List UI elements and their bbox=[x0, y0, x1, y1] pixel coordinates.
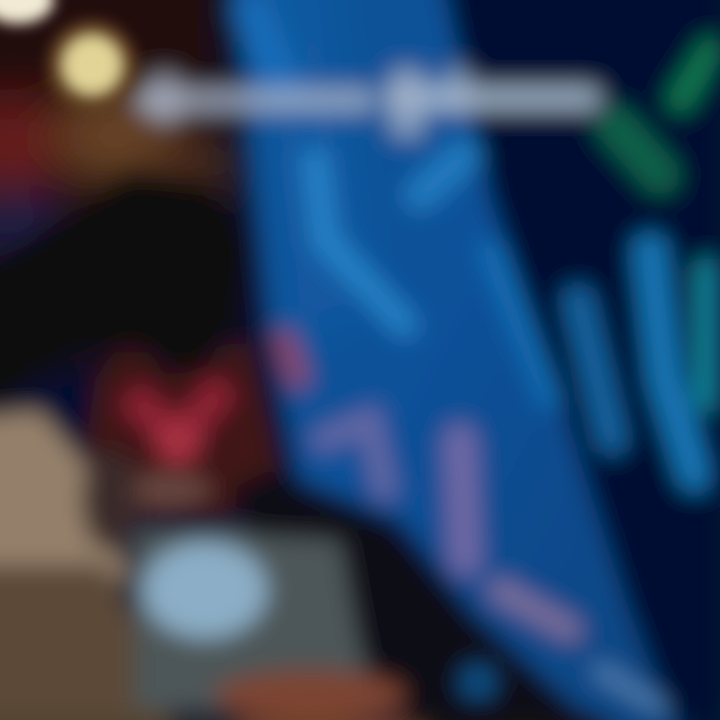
chart: light blue screen lines bbox=[250, 10, 550, 400]
object: orange skin at bottom bbox=[215, 670, 405, 720]
icon: top-left light bbox=[0, 0, 54, 24]
object: pale blue light behind arm bbox=[135, 530, 365, 710]
person: dark hair bbox=[0, 170, 250, 420]
chart: blue bars on dark screen bbox=[578, 250, 708, 475]
panel: bright left band of screen bbox=[235, 0, 370, 350]
heading: illegible white streak of blurred text bbox=[135, 66, 600, 138]
person: red face bbox=[85, 340, 280, 515]
object: black diagonal arm bbox=[230, 470, 590, 720]
panel: blue market screen bbox=[225, 0, 670, 720]
icon: ceiling lamp glow bbox=[48, 21, 136, 109]
person: beige shirt bbox=[0, 410, 170, 720]
object: blue dot at bottom bbox=[460, 664, 496, 700]
chart: pink candlesticks bbox=[285, 340, 660, 708]
background: dark red room left side bbox=[0, 0, 240, 360]
bottom edge colour strip bbox=[0, 690, 720, 720]
chart: green line bbox=[615, 50, 712, 175]
